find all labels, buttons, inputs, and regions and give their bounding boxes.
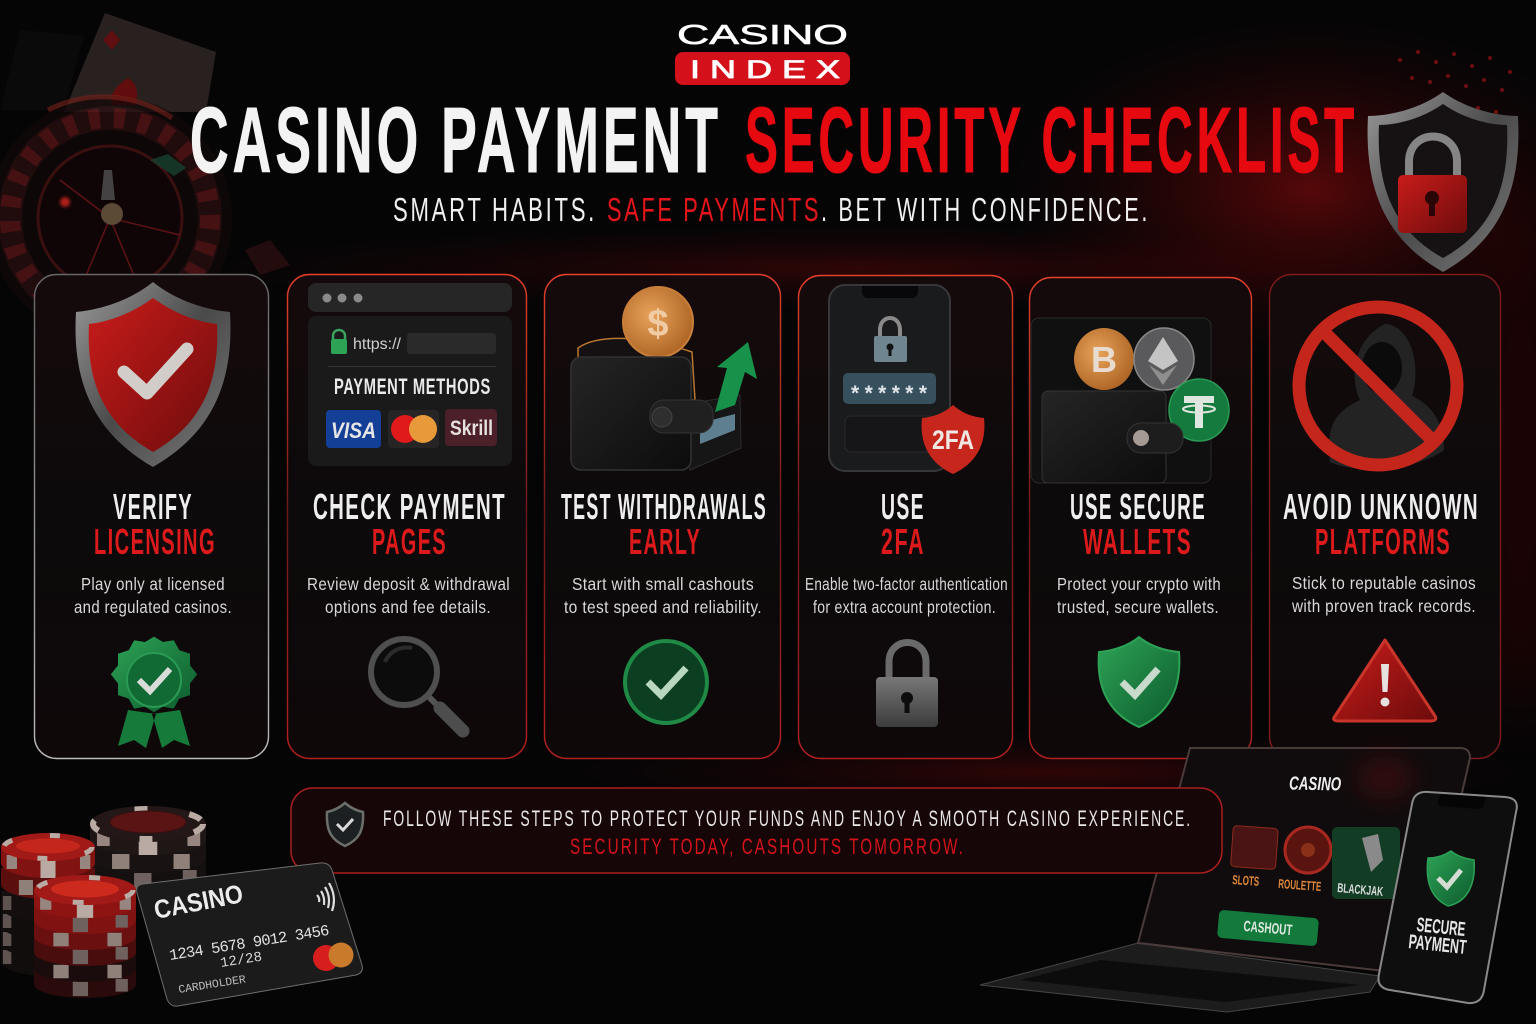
heading: VERIFY xyxy=(113,486,193,527)
roulette tile xyxy=(1278,827,1331,894)
icon: warning triangle xyxy=(1334,640,1436,721)
description: Enable two-factor authentication xyxy=(805,574,1008,594)
description xyxy=(1291,573,1476,616)
panel: check payment pages xyxy=(288,274,526,758)
panel: test withdrawals early: TEST WITHDRAWALS xyxy=(561,486,767,527)
blackjack tile: BLACKJAK xyxy=(1337,880,1384,899)
icon: bitcoin coin: B xyxy=(1091,339,1117,380)
laptop xyxy=(980,748,1470,1012)
heading xyxy=(561,486,767,562)
heading: EARLY xyxy=(629,521,701,562)
heading xyxy=(94,486,216,562)
description: trusted, secure wallets. xyxy=(1057,597,1219,617)
description: Review deposit & withdrawal xyxy=(307,574,510,594)
blackjack tile xyxy=(1332,827,1400,899)
description: for extra account protection. xyxy=(813,597,996,617)
icon: phone with password and 2FA shield xyxy=(829,285,984,474)
icon: ethereum coin xyxy=(1134,328,1194,390)
description: Protect your crypto with xyxy=(1057,574,1221,594)
icon: green padlock xyxy=(331,330,347,354)
logo plate: INDEX: I N D E X xyxy=(690,56,840,84)
icon: green check circle xyxy=(625,641,707,723)
heading: CHECK PAYMENT xyxy=(313,486,506,527)
icon: bitcoin coin xyxy=(1074,328,1134,390)
description xyxy=(74,574,232,617)
mastercard logo xyxy=(313,942,354,971)
logo word: CASINO: CASINO xyxy=(677,19,848,50)
icon: mastercard xyxy=(388,410,439,448)
banner text: SECURITY TODAY, CASHOUTS TOMORROW. xyxy=(570,834,965,859)
icon: green rosette xyxy=(111,637,197,748)
card brand: CASINO xyxy=(151,878,245,925)
panel: test withdrawals early xyxy=(544,274,780,758)
icon: browser window: PAYMENT METHODS xyxy=(334,374,491,399)
description xyxy=(805,574,1008,617)
icon: tether coin xyxy=(1169,379,1229,441)
icon: visa: VISA xyxy=(331,418,376,443)
payment card xyxy=(137,863,362,1006)
heading: LICENSING xyxy=(94,521,216,562)
description: options and fee details. xyxy=(325,597,491,617)
icon: wallet with coin and arrow xyxy=(571,287,757,470)
heading: WALLETS xyxy=(1083,521,1192,562)
card number: 1234 5678 9012 3456 xyxy=(168,922,331,965)
description: with proven track records. xyxy=(1291,596,1476,616)
heading: USE xyxy=(881,486,925,527)
icon: phone with password and 2FA shield: ****** xyxy=(851,382,928,405)
decorative red dots top right xyxy=(1398,50,1518,122)
slots tile: SLOTS xyxy=(1232,872,1260,889)
icon: top right padlock shield xyxy=(1368,92,1518,272)
heading: USE SECURE xyxy=(1070,486,1206,527)
callout banner xyxy=(291,788,1222,873)
description: and regulated casinos. xyxy=(74,597,232,617)
contactless icon xyxy=(317,883,334,911)
heading xyxy=(1283,486,1479,562)
description xyxy=(307,574,510,617)
panel: verify licensing xyxy=(34,274,268,758)
ace card decoration xyxy=(0,13,216,112)
panel: use secure wallets xyxy=(1030,278,1252,758)
icon: browser window: https:// xyxy=(353,336,402,353)
icon: 2FA shield xyxy=(922,405,984,474)
icon: red shield with check xyxy=(76,282,230,467)
subtitle xyxy=(393,191,1150,228)
cardholder: CARDHOLDER xyxy=(178,973,247,997)
icon: visa xyxy=(326,410,381,448)
description: Stick to reputable casinos xyxy=(1292,573,1476,593)
icon: magnifier xyxy=(371,639,463,731)
icon: green shield xyxy=(1099,637,1179,727)
slots tile xyxy=(1231,826,1278,889)
roulette wheel decoration xyxy=(0,96,290,340)
phone caption: PAYMENT xyxy=(1407,931,1467,959)
subtitle: . BET WITH CONFIDENCE. xyxy=(821,191,1150,228)
phone caption: SECURE xyxy=(1415,914,1467,941)
heading xyxy=(313,486,506,562)
banner text xyxy=(383,806,1192,859)
icon: browser window xyxy=(308,283,512,466)
icon: skrill xyxy=(445,409,497,446)
icon: skrill: Skrill xyxy=(450,417,493,440)
cashout button xyxy=(1217,910,1319,946)
panel: use 2fa xyxy=(798,276,1012,758)
description: Play only at licensed xyxy=(81,574,225,594)
logo plate: INDEX xyxy=(675,52,850,85)
icon: phone shield xyxy=(1427,851,1474,906)
icon: 2FA shield: 2FA xyxy=(932,425,974,455)
heading xyxy=(1070,486,1206,562)
subtitle: SMART HABITS. xyxy=(393,191,597,228)
description: to test speed and reliability. xyxy=(564,597,762,617)
subtitle: SAFE PAYMENTS xyxy=(607,191,821,228)
phone caption xyxy=(1407,914,1467,959)
poker chip stacks xyxy=(1,806,206,998)
heading: PAGES xyxy=(372,521,447,562)
description xyxy=(564,574,762,617)
heading: 2FA xyxy=(881,521,925,562)
heading xyxy=(881,486,925,562)
description xyxy=(1057,574,1221,617)
card expiry: 12/28 xyxy=(219,950,263,972)
description: Start with small cashouts xyxy=(572,574,754,594)
icon: wallet with coin and arrow: $ xyxy=(647,303,669,345)
icon: padlock xyxy=(876,642,938,727)
panel: avoid unknown platforms xyxy=(1270,274,1500,758)
icon: small shield xyxy=(327,803,363,846)
logo xyxy=(675,19,850,85)
title: CASINO PAYMENT xyxy=(190,88,722,192)
icon: prohibited hooded figure xyxy=(1299,307,1457,469)
cashout button: CASHOUT xyxy=(1243,918,1293,939)
roulette tile: ROULETTE xyxy=(1278,876,1322,894)
laptop brand: CASINO xyxy=(1289,774,1341,795)
icon: crypto wallet xyxy=(1031,318,1229,483)
phone xyxy=(1378,792,1517,1003)
